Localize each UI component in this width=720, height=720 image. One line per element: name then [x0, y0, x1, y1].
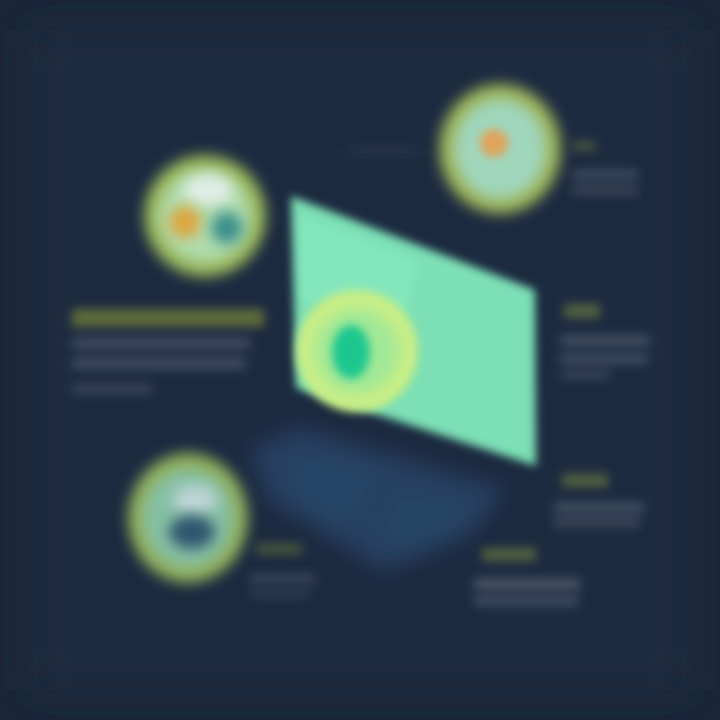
text block: bottom centre label: [474, 548, 580, 606]
icon: top left circle: [144, 155, 266, 277]
text block: middle right label: [560, 304, 650, 379]
central target icon: [296, 290, 418, 412]
text block: bottom left label: [250, 543, 316, 597]
laptop keyboard: [250, 428, 505, 570]
icon: bottom left circle: [128, 453, 248, 583]
laptop screen: [291, 196, 536, 466]
icon: top right circle: [439, 84, 561, 214]
text block: left main label: [72, 309, 264, 394]
text block: top right label: [572, 141, 638, 194]
faint top connector: [350, 146, 420, 156]
text block: lower right label: [554, 474, 644, 527]
